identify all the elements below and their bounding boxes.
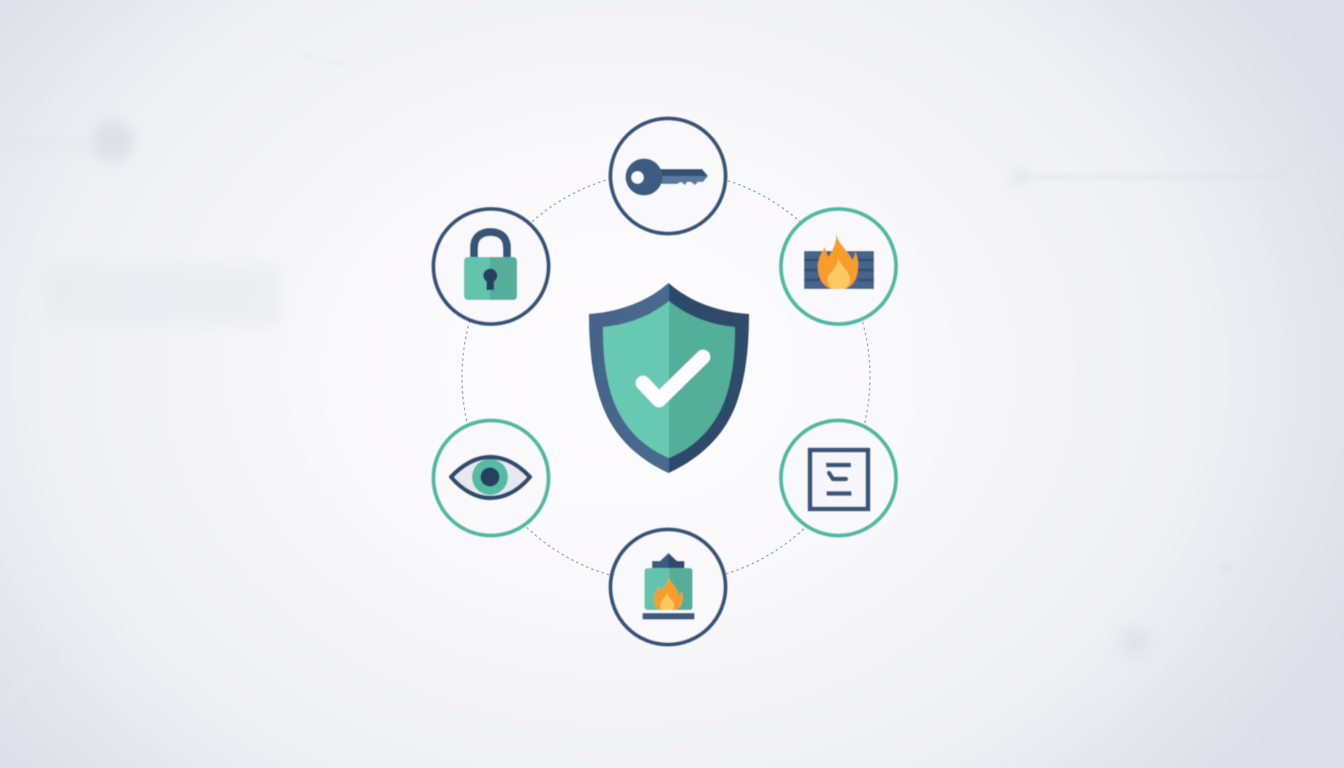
dashed connecting ring: [462, 171, 870, 583]
node: padlock: [434, 209, 548, 324]
icon: eye: [451, 457, 530, 498]
node: eye monitoring: [434, 420, 548, 536]
icon: burning brick wall: [804, 233, 874, 289]
icon: padlock: [464, 232, 517, 300]
central shield with checkmark: [589, 283, 749, 473]
icon: framed list: [810, 450, 868, 509]
node: document checklist: [781, 420, 896, 536]
node: protected fire vault: [610, 530, 726, 644]
shield inner right face: [669, 301, 735, 458]
node: key: [610, 118, 726, 234]
icon: key: [626, 158, 708, 196]
node: firewall: [781, 209, 896, 324]
shield inner left face: [603, 301, 669, 458]
icon: fire inside housing: [642, 553, 694, 620]
checkmark: [643, 357, 703, 400]
shield outer border: [589, 283, 749, 473]
